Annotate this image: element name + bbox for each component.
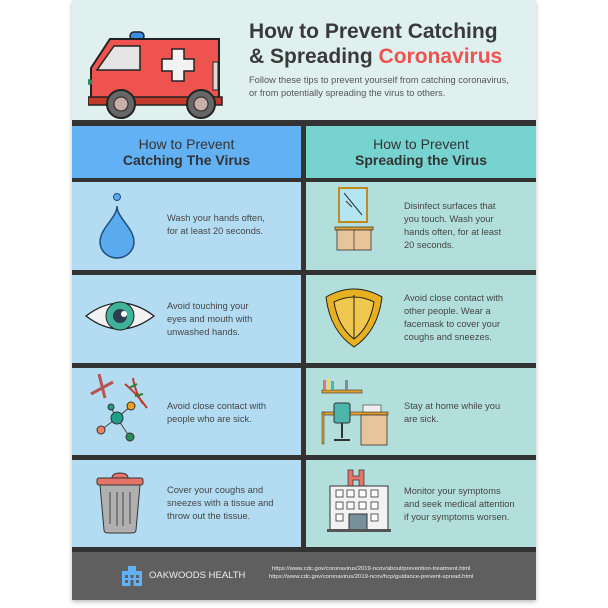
text [167, 301, 252, 337]
text: if your symptoms worsen. [404, 512, 509, 522]
text: people who are sick. [167, 414, 252, 424]
panel: cover coughs [72, 460, 301, 547]
brand name: OAKWOODS HEALTH [149, 570, 245, 581]
icon: ambulance [88, 31, 223, 119]
heading: spreading: Spreading the Virus [355, 152, 487, 168]
text: other people. Wear a [404, 306, 491, 316]
text: unwashed hands. [167, 327, 240, 337]
subtitle: or from potentially spreading the virus to others. [249, 88, 445, 98]
text: coughs and sneezes. [404, 332, 492, 342]
text: and seek medical attention [404, 499, 515, 509]
text: Wash your hands often, [167, 213, 265, 223]
heading: spreading [306, 126, 536, 178]
footer [72, 552, 536, 600]
panel: disinfect [306, 182, 536, 270]
text [404, 401, 500, 424]
text: eyes and mouth with [167, 314, 252, 324]
title: & Spreading Coronavirus [249, 45, 502, 68]
icon: shield [326, 288, 382, 348]
text: are sick. [404, 414, 439, 424]
title: How to Prevent Catching [249, 20, 498, 43]
text: hands often, for at least [404, 227, 501, 237]
text [167, 213, 265, 236]
icon: mirror and cabinet [334, 187, 374, 250]
icon: eye [85, 302, 155, 330]
text [167, 401, 266, 424]
text [404, 293, 503, 342]
text: Avoid close contact with [404, 293, 503, 303]
text: throw out the tissue. [167, 511, 250, 521]
icon: virus molecules [90, 374, 148, 442]
text: Avoid close contact with [167, 401, 266, 411]
header panel [72, 0, 536, 120]
text [404, 486, 515, 522]
text: Disinfect surfaces that [404, 201, 495, 211]
text: sneezes with a tissue and [167, 498, 273, 508]
text: Monitor your symptoms [404, 486, 501, 496]
sources [269, 566, 473, 580]
title [249, 20, 502, 68]
subtitle: Follow these tips to prevent yourself from catching coronavirus, [249, 75, 509, 85]
heading: spreading: How to Prevent [373, 136, 469, 152]
heading: catching [72, 126, 301, 178]
text: for at least 20 seconds. [167, 226, 263, 236]
icon: hospital [327, 470, 391, 532]
panel: stay home [306, 368, 536, 455]
card background [72, 0, 536, 600]
icon: trash can [96, 472, 144, 534]
panel: wash hands [72, 182, 301, 270]
icon: building logo [122, 566, 142, 586]
text [167, 485, 273, 521]
text [404, 201, 502, 250]
icon: desk [322, 379, 388, 446]
subtitle [249, 75, 509, 98]
panel: close contact mask [306, 275, 536, 363]
text: facemask to cover your [404, 319, 500, 329]
heading: catching: How to Prevent [139, 136, 234, 152]
text: Cover your coughs and [167, 485, 263, 495]
icon: water drop [99, 193, 135, 259]
sources: https://www.cdc.gov/coronavirus/2019-ncov/about/prevention-treatment.html [272, 566, 470, 572]
text: Stay at home while you [404, 401, 500, 411]
panel: sick people [72, 368, 301, 455]
panel: monitor symptoms [306, 460, 536, 547]
text: Avoid touching your [167, 301, 248, 311]
heading: catching: Catching The Virus [123, 152, 250, 168]
panel: eyes [72, 275, 301, 363]
text: you touch. Wash your [404, 214, 494, 224]
sources: https://www.cdc.gov/coronavirus/2019-ncov/hcp/guidance-prevent-spread.html [269, 574, 473, 580]
text: 20 seconds. [404, 240, 454, 250]
